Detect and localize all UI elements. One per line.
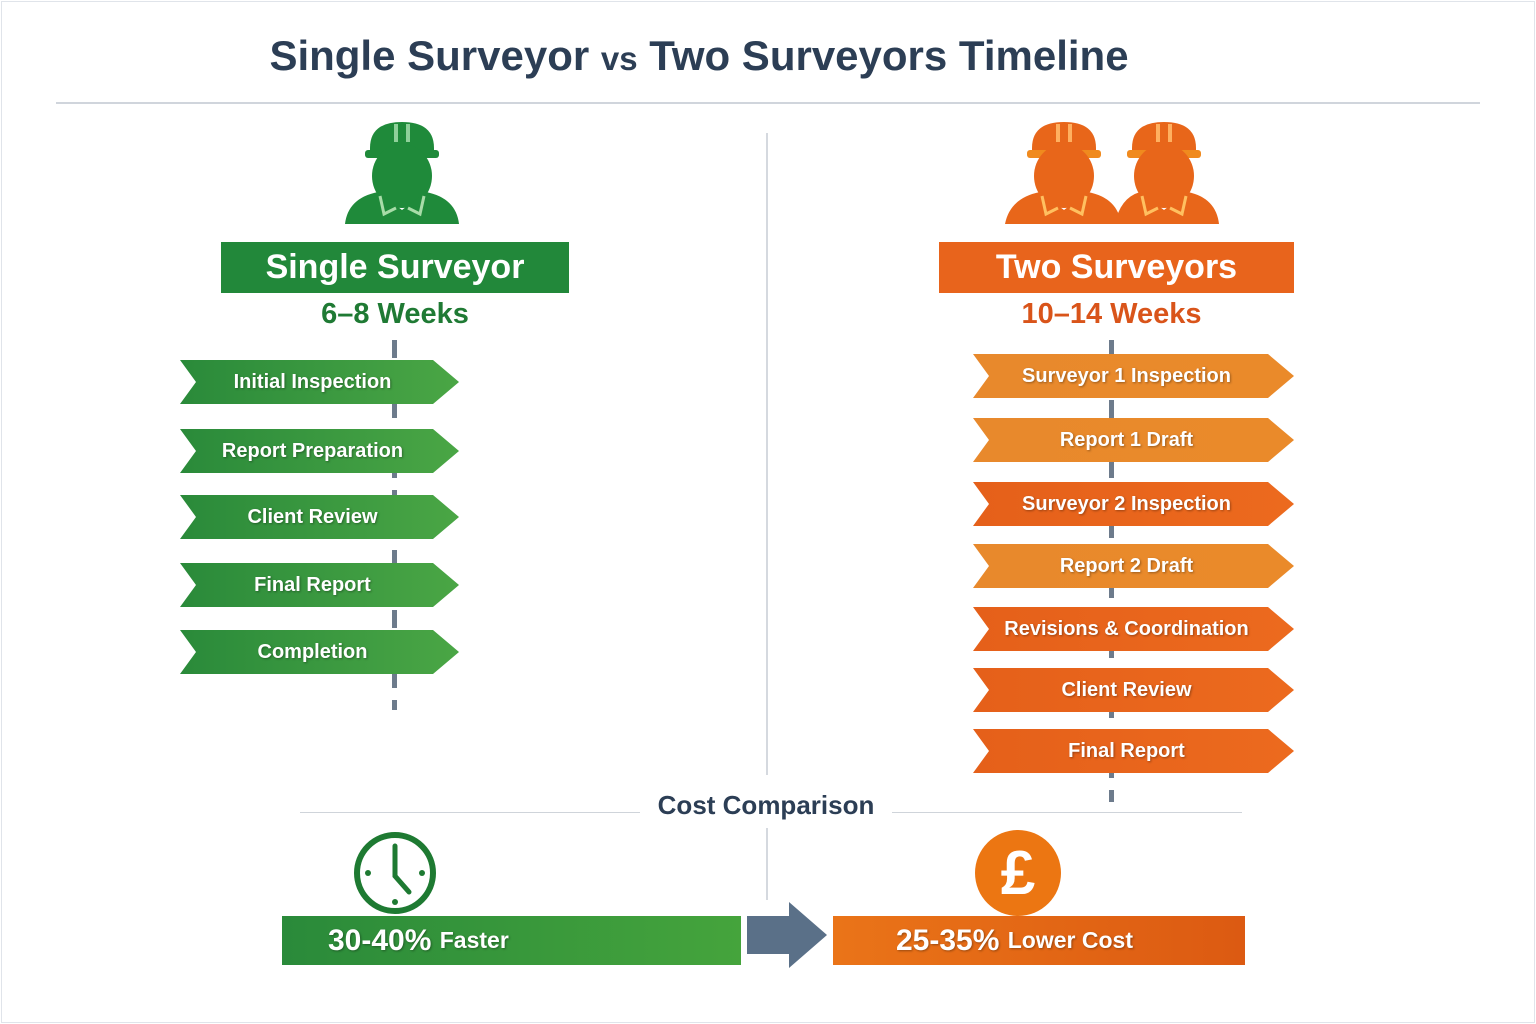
icon: pound: £ <box>1001 838 1035 908</box>
bar: 30-40% faster: Faster <box>440 927 509 953</box>
header: single surveyor: Single Surveyor <box>266 248 524 286</box>
heading: cost comparison: Cost Comparison <box>658 790 874 820</box>
icon: pound <box>975 830 1061 916</box>
text: Initial Inspection <box>234 370 391 392</box>
text: Report 2 Draft <box>1060 554 1193 576</box>
timeline: single surveyor steps <box>180 360 459 674</box>
text: Revisions & Coordination <box>1004 618 1249 640</box>
text: Report 1 Draft <box>1060 428 1193 450</box>
arrow: comparison <box>747 902 827 968</box>
text: Client Review <box>247 506 378 528</box>
icon: two surveyors <box>1005 122 1219 224</box>
bar: 25-35% lower cost: 25-35% <box>896 924 999 956</box>
text: Completion <box>258 640 368 662</box>
text: Client Review <box>1061 678 1192 700</box>
text: Surveyor 2 Inspection <box>1022 492 1231 514</box>
header: two surveyors: Two Surveyors <box>996 248 1237 286</box>
text: Final Report <box>1068 740 1185 762</box>
icon: single surveyor <box>345 122 459 224</box>
duration: 6-8 weeks: 6–8 Weeks <box>321 298 469 330</box>
bar: 30-40% faster <box>282 916 741 965</box>
header: two surveyors <box>939 242 1294 293</box>
timeline: two surveyors steps <box>973 354 1294 773</box>
bar: 25-35% lower cost: Lower Cost <box>1008 927 1133 953</box>
icon: clock <box>354 832 436 914</box>
title: Single Surveyor vs Two Surveyors Timeline <box>269 32 1129 79</box>
duration: 10-14 weeks: 10–14 Weeks <box>1021 298 1202 330</box>
bar: 30-40% faster: 30-40% <box>328 924 431 956</box>
text: Surveyor 1 Inspection <box>1022 364 1231 386</box>
bar: 25-35% lower cost <box>833 916 1245 965</box>
text: Final Report <box>254 574 371 596</box>
text: Report Preparation <box>222 440 403 462</box>
header: single surveyor <box>221 242 569 293</box>
